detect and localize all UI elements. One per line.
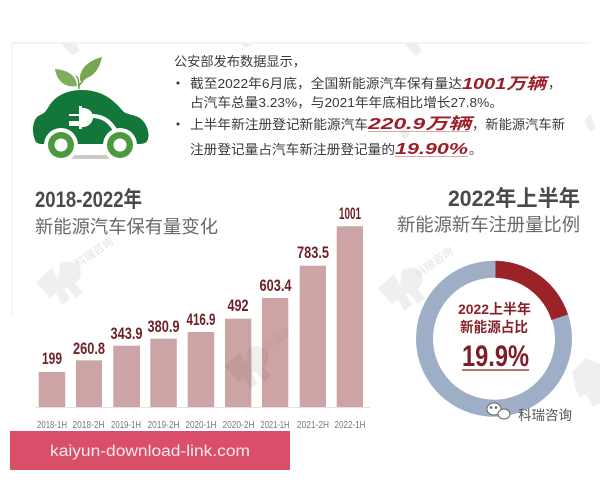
plug and cable (69, 106, 117, 131)
period labels: 2021-1H (260, 419, 290, 431)
icon: wechat bubbles (487, 403, 510, 419)
bar chart: holdings 2018-2022 (35, 204, 370, 431)
bullet one (176, 75, 561, 110)
heading: bar chart title (35, 187, 218, 237)
value labels (42, 204, 361, 368)
value labels: 1001 (339, 204, 361, 223)
link banner (10, 431, 290, 470)
watermark over bars: 科瑞咨询 (260, 318, 304, 354)
value labels: 380.9 (148, 317, 180, 336)
bullet two: ，新能源汽车新 (472, 117, 565, 132)
bars (39, 226, 363, 407)
watermarks (36, 43, 600, 406)
value labels: 783.5 (297, 243, 329, 262)
right wheel (103, 128, 137, 162)
period labels: 2019-2H (148, 419, 180, 431)
watermark over bars (225, 328, 288, 388)
value labels: 260.8 (73, 339, 105, 358)
heading: donut chart title (397, 186, 580, 235)
bullet one: 1001万辆 (462, 75, 550, 93)
period labels: 2018-2H (72, 419, 104, 431)
heading: donut chart title: 2022年上半年 (448, 186, 580, 211)
wechat account mark: 科瑞咨询 (518, 408, 572, 423)
bullet two (176, 115, 565, 158)
period labels: 2020-2H (222, 419, 254, 431)
centre label: 19.9% (462, 340, 529, 373)
centre label: 新能源占比 (460, 319, 528, 335)
period labels: 2022-1H (334, 419, 366, 431)
bullet two: 上半年新注册登记新能源汽车 (190, 117, 368, 132)
bullet two: 19.90% (395, 141, 468, 158)
left wheel (44, 128, 78, 162)
period labels: 2020-1H (186, 419, 216, 431)
bullet one: ， (548, 76, 561, 91)
intro line: 公安部发布数据显示， (174, 54, 306, 69)
bullet one: 占汽车总量3.23%，与2021年年底相比增长27.8%。 (190, 95, 503, 110)
car shadow (54, 155, 130, 159)
donut chart: 19.9% share (424, 261, 568, 408)
heading: bar chart title: 2018-2022年 (35, 187, 142, 212)
centre label: 2022上半年 (458, 301, 531, 317)
value labels: 492 (228, 296, 248, 315)
text block: data summary (174, 54, 565, 158)
car body (33, 90, 149, 144)
link banner: kaiyun-download-link.com (50, 443, 250, 460)
heading: bar chart title: 新能源汽车保有量变化 (35, 216, 218, 237)
watermarks: 科瑞咨询 (412, 244, 456, 280)
value labels: 603.4 (260, 276, 292, 295)
wechat account mark (487, 403, 572, 423)
bullet two: 注册登记量占汽车新注册登记量的 (190, 142, 395, 157)
red segment (496, 261, 568, 320)
centre label (458, 301, 531, 373)
value labels: 343.9 (110, 324, 142, 343)
heading: donut chart title: 新能源新车注册量比例 (397, 214, 580, 235)
period labels: 2018-1H (37, 419, 67, 431)
bullet two: 。 (469, 142, 482, 157)
period labels: 2019-1H (111, 419, 141, 431)
icon: green electric car with leaves (33, 57, 149, 162)
value labels: 416.9 (186, 310, 216, 329)
value labels: 199 (42, 349, 62, 368)
watermarks: 科瑞咨询 (72, 234, 116, 270)
period labels (37, 419, 366, 431)
bullet two: 220.9万辆 (367, 115, 475, 133)
period labels: 2021-2H (297, 419, 329, 431)
leaves (55, 57, 102, 89)
bullet one: 截至2022年6月底，全国新能源汽车保有量达 (190, 76, 462, 91)
